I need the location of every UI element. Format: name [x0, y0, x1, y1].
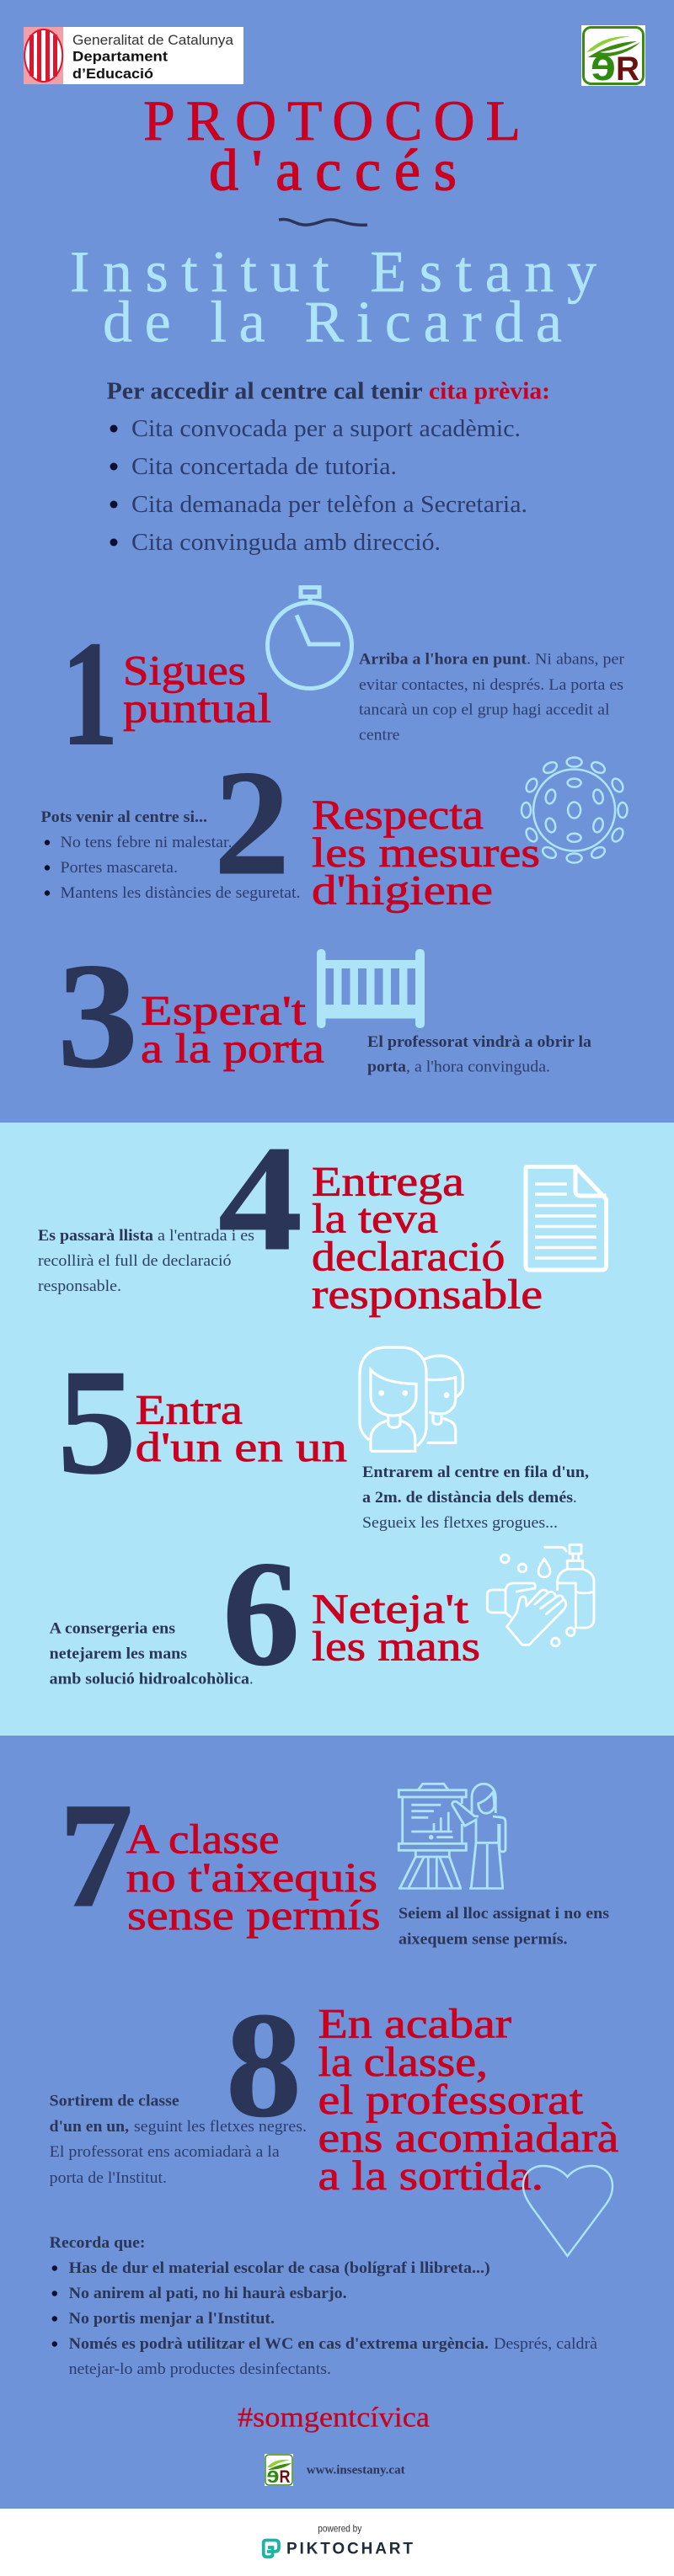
text block: reminders: Recorda que:: [50, 2235, 146, 2252]
wave divider: [279, 219, 367, 225]
number 5: 5: [57, 1337, 136, 1506]
text: enter in line: .: [573, 1490, 577, 1507]
subtitle: school name: Institut Estany: [70, 240, 596, 305]
heading: Neteja't les mans: les mans: [312, 1623, 480, 1670]
text: hand sanitiser: .: [249, 1671, 254, 1688]
panel: final steps: [0, 1736, 674, 2509]
text block: reminders: No portis menjar a l'Institut.: [69, 2311, 275, 2328]
text: stay seated: Seiem al lloc assignat i no ens: [399, 1906, 609, 1923]
text: leaving the class: [50, 2093, 307, 2187]
icon: teacher at board: [399, 1784, 506, 1888]
icon: stopwatch: [268, 588, 352, 689]
text: leaving the class: d'un en un,: [50, 2119, 129, 2136]
step 6: [50, 1529, 594, 1697]
step 3: [57, 931, 591, 1099]
panel: light blue steps: [0, 1114, 674, 1736]
logo: Generalitat de Catalunya: Departament: [72, 49, 168, 64]
text: hand sanitiser: A consergeria ens: [50, 1620, 175, 1637]
text block: reminders: Has de dur el material escolar de casa (bolígraf i llibreta...): [69, 2260, 490, 2277]
text: enter in line: Entrarem al centre en fila d'un,: [362, 1464, 589, 1481]
text: enter in line: Segueix les fletxes grogues...: [362, 1515, 558, 1532]
heading: En acabar la classe: el professorat: [318, 2076, 583, 2123]
text: punctuality: Arriba a l'hora en punt: [359, 652, 527, 669]
heading: Neteja't les mans: Neteja't: [312, 1585, 468, 1632]
heading: A classe no t'aixequis sense permís: sense permís: [127, 1891, 381, 1939]
logo: Generalitat de Catalunya: d’Educació: [72, 66, 153, 82]
heading: En acabar la classe: En acabar: [318, 2000, 511, 2047]
step 2: [40, 739, 627, 913]
text: hand sanitiser: [50, 1620, 254, 1688]
icon: washing hands: [487, 1544, 594, 1646]
number 2: 2: [214, 739, 290, 906]
icon: door gate: [317, 949, 425, 1028]
text block: reminders: netejar-lo amb productes desinfectants.: [69, 2361, 331, 2378]
text: attendance list: [38, 1228, 254, 1295]
heading: Respecta les mesures d'higiene: Respecta: [312, 791, 484, 838]
logo: Institut Estany de la Ricarda: R: [616, 51, 639, 88]
number 3: 3: [57, 931, 138, 1099]
hashtag: #somgentcívica: [238, 2403, 430, 2434]
text: conditions list: [40, 809, 300, 902]
heading: En acabar la classe: ens acomiadarà: [318, 2114, 618, 2161]
heading: A classe no t'aixequis sense permís: A classe: [126, 1816, 280, 1863]
number 6: 6: [222, 1529, 300, 1697]
text block: appointment requirement: cita prèvia:: [429, 377, 550, 404]
subtitle: school name: de la Ricarda: [103, 290, 562, 355]
heading: Sigues puntual: [123, 646, 271, 731]
number 7: 7: [59, 1771, 133, 1939]
text block: appointment requirement: Cita convinguda amb direcció.: [131, 530, 441, 556]
icon: Piktochart mark: [264, 2540, 279, 2557]
text: punctuality: [359, 652, 624, 744]
text block: reminders: No anirem al pati, no hi haurà esbarjo.: [69, 2285, 347, 2302]
footer: powered by Piktochart: [0, 2509, 674, 2576]
heading: En acabar la classe: la classe,: [318, 2038, 488, 2085]
heading: Entrega la teva declaració responsable: [312, 1157, 543, 1317]
subtitle: school name: [70, 240, 596, 355]
heading: Espera't a la porta: a la porta: [141, 1025, 324, 1072]
heading: Sigues puntual: Sigues: [123, 646, 246, 693]
heading: Entra d'un en un: Entra: [136, 1385, 243, 1432]
text block: appointment requirement: Cita convocada per a suport acadèmic.: [131, 416, 521, 442]
text: attendance list: Es passarà llista: [38, 1228, 153, 1245]
text: teacher opens door: [367, 1034, 591, 1076]
text: leaving the class: Sortirem de classe: [50, 2093, 179, 2110]
logo: Generalitat de Catalunya: Generalitat de Catalunya: [72, 32, 234, 48]
heading: Entrega la teva declaració responsable: Entrega: [312, 1157, 464, 1204]
heading: Sigues puntual: puntual: [123, 684, 271, 731]
heading: Entra d'un en un: d'un en un: [136, 1423, 347, 1470]
step 5: [57, 1337, 589, 1532]
heading: Entrega la teva declaració responsable: declaració: [312, 1233, 506, 1280]
step 4: [38, 1114, 607, 1317]
icon: heart: [523, 2166, 612, 2256]
text block: appointment requirement: Cita concertada de tutoria.: [131, 454, 397, 480]
text: punctuality: evitar contactes, ni després. La porta es: [359, 677, 623, 694]
text block: reminders: Després, caldrà: [494, 2336, 597, 2353]
text block: appointment requirement: Cita demanada per telèfon a Secretaria.: [131, 492, 527, 518]
number 1: 1: [61, 610, 118, 776]
icon: virus: [522, 758, 627, 862]
text block: appointment requirement: Per accedir al centre cal tenir: [106, 377, 423, 404]
text: leaving the class: porta de l'Institut.: [50, 2170, 167, 2187]
text: conditions list: No tens febre ni malestar.: [61, 835, 233, 851]
logo: Institut Estany de la Ricarda: [581, 25, 645, 90]
icon: document: [526, 1167, 607, 1270]
step 7: [59, 1771, 609, 1949]
heading: Respecta les mesures d'higiene: les mesures: [312, 829, 540, 876]
heading: Entrega la teva declaració responsable: la teva: [312, 1195, 438, 1242]
text: leaving the class: El professorat ens acomiadarà a la: [50, 2144, 280, 2161]
text: hand sanitiser: netejarem les mans: [50, 1645, 187, 1662]
title: [143, 88, 521, 204]
heading: Espera't a la porta: [141, 987, 324, 1072]
text: stay seated: [399, 1906, 609, 1949]
text: teacher opens door: , a l'hora convinguda.: [406, 1059, 550, 1076]
heading: Espera't a la porta: Espera't: [141, 987, 306, 1034]
logo: Generalitat de Catalunya: [24, 27, 243, 84]
heading: A classe no t'aixequis sense permís: [126, 1816, 381, 1939]
title: d'accés: [209, 138, 457, 204]
text block: appointment requirement: [106, 377, 550, 556]
text: hand sanitiser: amb solució hidroalcohòlica: [50, 1671, 249, 1688]
text: teacher opens door: porta: [367, 1059, 406, 1076]
text: attendance list: responsable.: [38, 1278, 121, 1295]
heading: Respecta les mesures d'higiene: d'higiene: [312, 866, 493, 913]
text: enter in line: a 2m. de distància dels demés: [362, 1490, 573, 1507]
footer: powered by Piktochart: powered by: [318, 2523, 361, 2535]
logo: Institut Estany de la Ricarda: e: [591, 40, 616, 90]
step 1: [61, 588, 624, 776]
number 4: 4: [218, 1114, 302, 1282]
heading: Respecta les mesures d'higiene: [312, 791, 540, 913]
text: punctuality: . Ni abans, per: [527, 652, 624, 669]
number 8: 8: [226, 1981, 302, 2148]
text block: reminders: [50, 2235, 597, 2378]
footer: powered by Piktochart: PIKTOCHART: [286, 2541, 413, 2558]
heading: Neteja't les mans: [312, 1585, 480, 1670]
heading: En acabar la classe: a la sortida.: [318, 2152, 543, 2199]
footer logo and website: www.insestany.cat: [307, 2464, 405, 2477]
heading: En acabar la classe: [318, 2000, 618, 2199]
step 8: [50, 1981, 618, 2256]
heading: Entrega la teva declaració responsable: responsable: [312, 1270, 543, 1317]
text: teacher opens door: El professorat vindrà a obrir la: [367, 1034, 591, 1051]
text: enter in line: [362, 1464, 589, 1532]
heading: Entra d'un en un: [136, 1385, 347, 1470]
text: punctuality: centre: [359, 728, 399, 744]
text: stay seated: aixequem sense permís.: [399, 1932, 568, 1949]
footer logo and website: R: [280, 2467, 290, 2487]
text: attendance list: recollirà el full de declaració: [38, 1253, 231, 1270]
text block: reminders: Només es podrà utilitzar el WC en cas d'extrema urgència.: [69, 2336, 489, 2353]
heading: A classe no t'aixequis sense permís: no t'aixequis: [126, 1853, 377, 1901]
text: leaving the class: seguint les fletxes negres.: [134, 2119, 307, 2136]
text: punctuality: tancarà un cop el grup hagi accedit al: [359, 702, 610, 719]
panel: header and appointment: [0, 0, 674, 1123]
text: conditions list: Mantens les distàncies de seguretat.: [61, 885, 300, 902]
footer logo and website: e: [266, 2462, 280, 2488]
text: conditions list: Pots venir al centre si...: [40, 809, 207, 826]
footer logo and website: [265, 2454, 405, 2488]
icon: two people: [360, 1347, 463, 1451]
text: conditions list: Portes mascareta.: [61, 860, 178, 877]
title: PROTOCOL: [143, 88, 521, 152]
text: attendance list: a l'entrada i es: [158, 1228, 254, 1245]
